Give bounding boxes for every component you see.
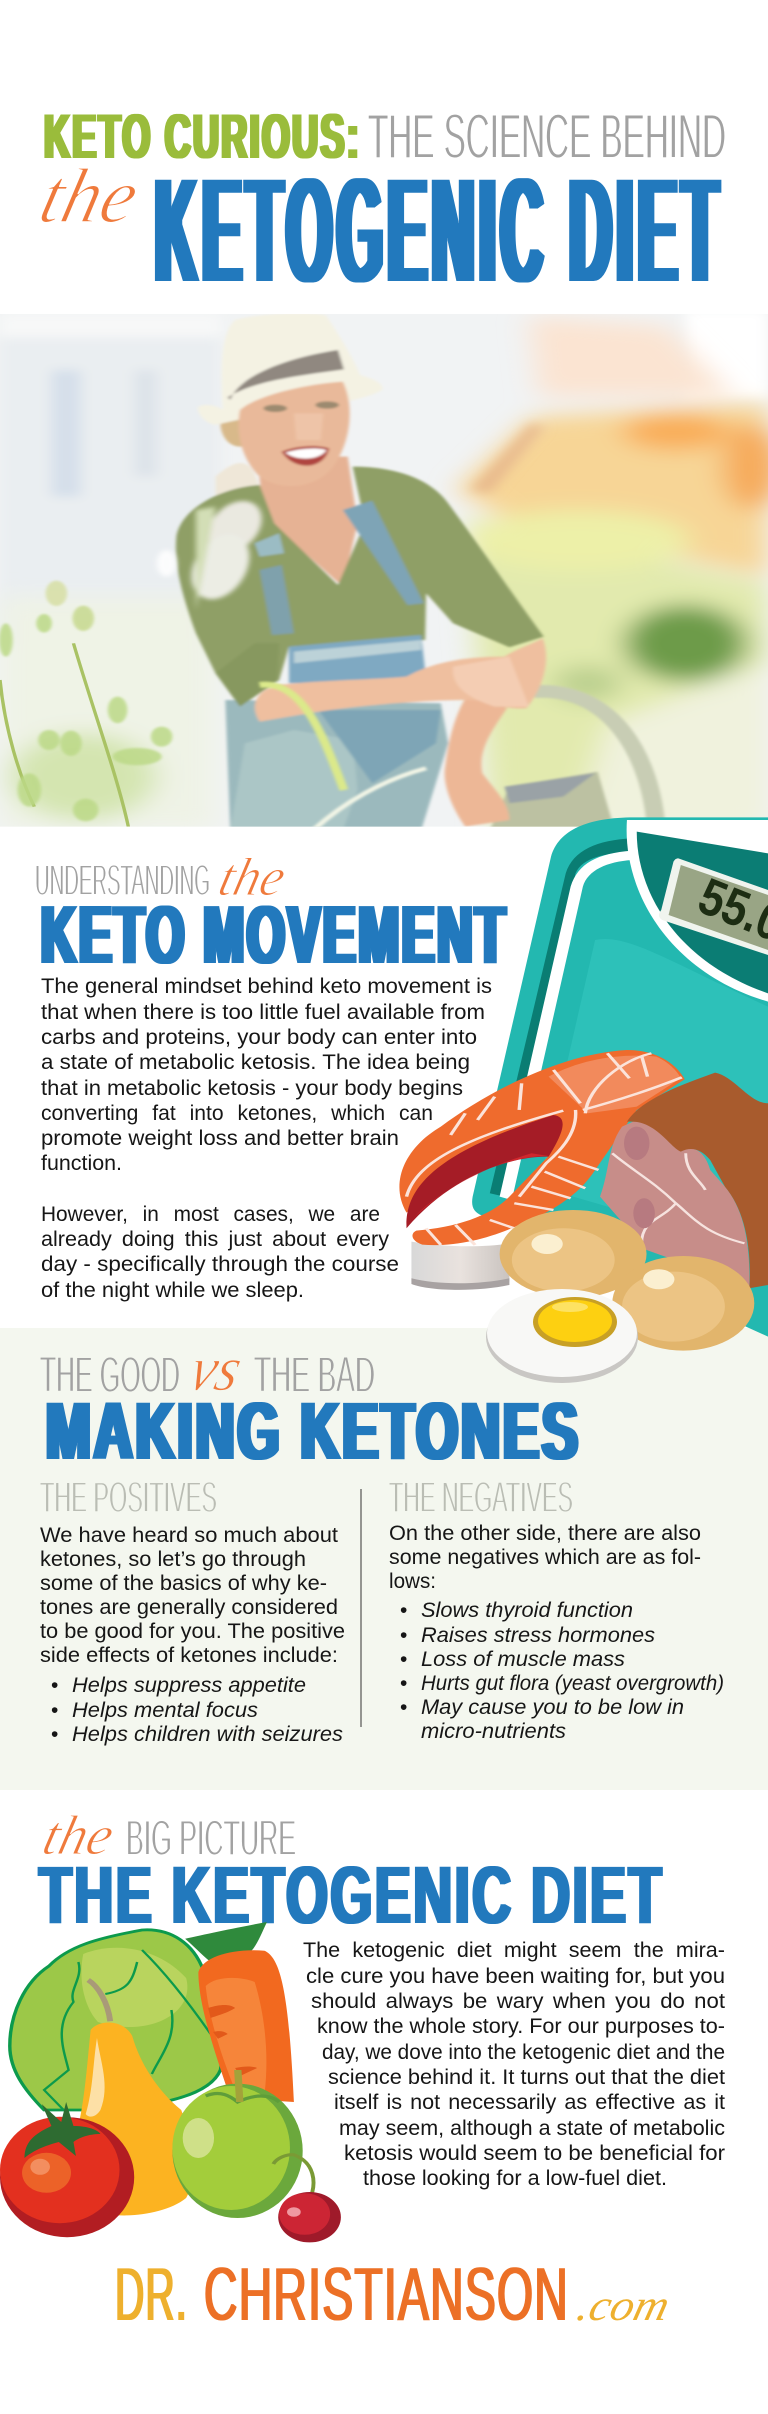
negatives text: On the other side, there are also <box>389 1522 701 1545</box>
positives text: tones are generally considered <box>40 1596 338 1619</box>
positives list: • <box>51 1699 58 1722</box>
positives list: • <box>51 1723 58 1746</box>
jeans <box>225 700 448 830</box>
positives text <box>40 1524 345 1667</box>
negatives list: • <box>400 1696 407 1719</box>
hat <box>198 313 382 425</box>
heading: understanding the <box>35 847 292 907</box>
hair <box>220 400 260 447</box>
positives text: side effects of ketones include: <box>40 1644 338 1667</box>
pear <box>88 1980 110 2021</box>
heading: the big picture: BIG PICTURE <box>126 1810 296 1866</box>
plants <box>0 643 128 827</box>
body text: ketosis would seem to be beneficial for <box>344 2142 725 2165</box>
negatives list: • <box>400 1648 407 1671</box>
body text: The general mindset behind keto movement is <box>41 975 492 998</box>
illustration: bathroom scale <box>472 817 768 1337</box>
negatives list: • <box>400 1672 407 1695</box>
body text: day, we dove into the ketogenic diet and the <box>322 2041 725 2064</box>
body text: day - specifically through the course <box>41 1253 399 1276</box>
subheading: the negatives: THE NEGATIVES <box>389 1473 573 1522</box>
face <box>239 382 350 486</box>
column: negatives <box>389 1473 724 1743</box>
body text: already doing this just about every <box>41 1228 390 1251</box>
body text <box>41 975 492 1302</box>
column: positives <box>40 1473 345 1746</box>
body text: should always be wary when you do not <box>311 1990 725 2013</box>
arm <box>255 638 546 722</box>
script word: the: the <box>32 153 147 240</box>
can body <box>490 772 615 830</box>
panel: the big picture <box>0 1805 725 2242</box>
apple <box>172 2084 303 2218</box>
illustration: eggs <box>486 1210 754 1383</box>
positives list: • <box>51 1674 58 1697</box>
heading: understanding the: the <box>213 847 292 907</box>
negatives list <box>400 1599 724 1743</box>
body text: converting fat into ketones, which can <box>41 1102 433 1125</box>
negatives text: some negatives which are as fol- <box>389 1546 701 1569</box>
negatives list: May cause you to be low in <box>421 1696 684 1719</box>
body text: cle cure you have been waiting for, but you <box>306 1965 725 1988</box>
negatives list: Hurts gut flora (yeast overgrowth) <box>421 1672 724 1695</box>
positives text: We have heard so much about <box>40 1524 338 1547</box>
negatives text <box>389 1522 701 1593</box>
overall bib <box>289 635 426 683</box>
negatives list: Loss of muscle mass <box>421 1648 626 1671</box>
heading: the good vs the bad: THE BAD <box>254 1346 375 1403</box>
body text: function. <box>41 1152 122 1175</box>
tomato <box>0 2117 134 2237</box>
positives list: Helps suppress appetite <box>72 1674 306 1697</box>
title line: keto curious: KETO CURIOUS: <box>44 102 361 172</box>
positives list: Helps children with seizures <box>72 1723 344 1746</box>
body text: carbs and proteins, your body can enter into <box>41 1026 477 1049</box>
body text: a state of metabolic ketosis. The idea being <box>41 1051 470 1074</box>
overall straps <box>260 565 294 635</box>
panel: understanding the keto movement <box>0 827 768 1328</box>
subheading: the positives: THE POSITIVES <box>40 1473 217 1522</box>
negatives list: micro-nutrients <box>421 1720 567 1743</box>
body text: itself is not necessarily as effective as it <box>334 2091 725 2114</box>
heading: the good vs the bad: vs <box>182 1334 250 1405</box>
positives list <box>51 1674 344 1746</box>
positives text: some of the basics of why ke- <box>40 1572 327 1595</box>
heading: the big picture: the <box>37 1805 120 1867</box>
grass stalk <box>260 685 344 790</box>
negatives list: • <box>400 1624 407 1647</box>
body text <box>303 1939 725 2190</box>
illustration: meat <box>600 1073 768 1288</box>
body text: science behind it. It turns out that the diet <box>328 2066 725 2089</box>
negatives list: • <box>400 1599 407 1622</box>
carrot top <box>185 1922 267 1962</box>
heading: understanding the: UNDERSTANDING <box>35 856 210 905</box>
negatives list: Raises stress hormones <box>421 1624 656 1647</box>
body text: However, in most cases, we are <box>41 1203 380 1226</box>
illustration: salmon steak <box>399 1050 685 1290</box>
title <box>32 102 726 316</box>
body text: The ketogenic diet might seem the mira- <box>303 1939 725 1962</box>
body text: those looking for a low-fuel diet. <box>363 2167 667 2190</box>
body text: of the night while we sleep. <box>41 1279 304 1302</box>
body text: promote weight loss and better brain <box>41 1127 399 1150</box>
cut egg <box>486 1289 638 1383</box>
carrot <box>198 1950 294 2102</box>
body text: may seem, although a state of metabolic <box>339 2117 725 2140</box>
positives list: Helps mental focus <box>72 1699 259 1722</box>
shirt <box>176 467 544 707</box>
photo: woman in garden <box>0 310 768 830</box>
illustration: vegetables <box>0 1922 341 2242</box>
negatives list: Slows thyroid function <box>421 1599 633 1622</box>
neck <box>257 457 358 587</box>
body text: that when there is too little fuel available from <box>41 1001 485 1024</box>
panel background <box>0 827 768 1328</box>
body text: know the whole story. For our purposes to- <box>317 2015 725 2038</box>
lettuce <box>10 1930 222 2110</box>
logo: dr christianson: DR. <box>115 2252 188 2336</box>
heading: the good vs the bad <box>40 1334 375 1405</box>
negatives text: lows: <box>389 1570 436 1593</box>
body text: that in metabolic ketosis - your body begins <box>41 1077 463 1100</box>
panel background <box>0 1328 768 1790</box>
panel: making ketones <box>0 1328 768 1790</box>
positives text: to be good for you. The positive <box>40 1620 345 1643</box>
logo: dr christianson: .com <box>573 2281 675 2330</box>
feather grass <box>156 498 266 606</box>
heading: the good vs the bad: THE GOOD <box>40 1346 180 1403</box>
heading: the big picture <box>37 1805 296 1867</box>
positives text: ketones, so let’s go through <box>40 1548 306 1571</box>
can handle <box>534 691 656 830</box>
cherry <box>273 2155 313 2202</box>
